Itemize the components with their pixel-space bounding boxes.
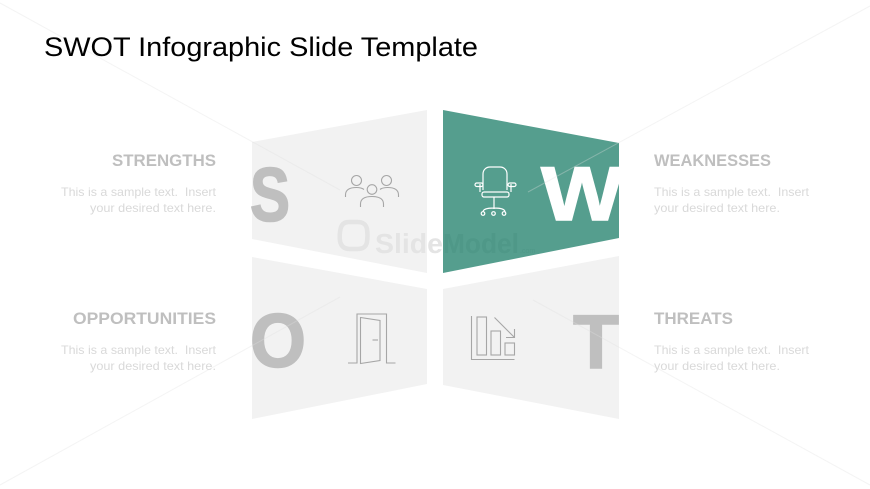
text block: opportunities: OPPORTUNITIES <box>73 310 216 328</box>
letter W: W <box>541 152 623 237</box>
icon: door <box>348 314 396 364</box>
watermark: SlideModel logo: Slide <box>375 228 443 259</box>
text block: threats: This is a sample text. Insert <box>654 343 810 357</box>
text block: opportunities: This is a sample text. Insert <box>61 343 217 357</box>
panel: threats <box>443 256 619 419</box>
letter S: S <box>250 153 290 238</box>
icon: declining bar chart <box>472 316 514 360</box>
text block: weaknesses: This is a sample text. Insert <box>654 185 810 199</box>
text block: strengths: STRENGTHS <box>112 152 216 170</box>
letter O: O <box>250 299 306 384</box>
text block: weaknesses: WEAKNESSES <box>654 152 771 170</box>
icon: team <box>346 176 398 207</box>
watermark: SlideModel logo: Model <box>443 228 519 259</box>
watermark: SlideModel logo <box>340 222 535 259</box>
text block: weaknesses <box>654 152 810 215</box>
text block: strengths: This is a sample text. Insert <box>61 185 217 199</box>
watermark: SlideModel logo: .com <box>520 248 535 255</box>
icon: office chair <box>475 167 516 215</box>
text block: strengths: your desired text here. <box>90 201 216 215</box>
text block: strengths <box>61 152 217 215</box>
panel: weaknesses <box>443 110 623 273</box>
text block: opportunities: your desired text here. <box>90 359 216 373</box>
letter T: T <box>573 300 619 385</box>
panel: strengths <box>250 110 427 273</box>
panel: opportunities <box>250 257 427 419</box>
title: SWOT Infographic Slide Template <box>44 32 478 62</box>
text block: weaknesses: your desired text here. <box>654 201 780 215</box>
text block: threats: your desired text here. <box>654 359 780 373</box>
text block: threats <box>654 310 810 373</box>
text block: threats: THREATS <box>654 310 733 328</box>
text block: opportunities <box>61 310 217 373</box>
